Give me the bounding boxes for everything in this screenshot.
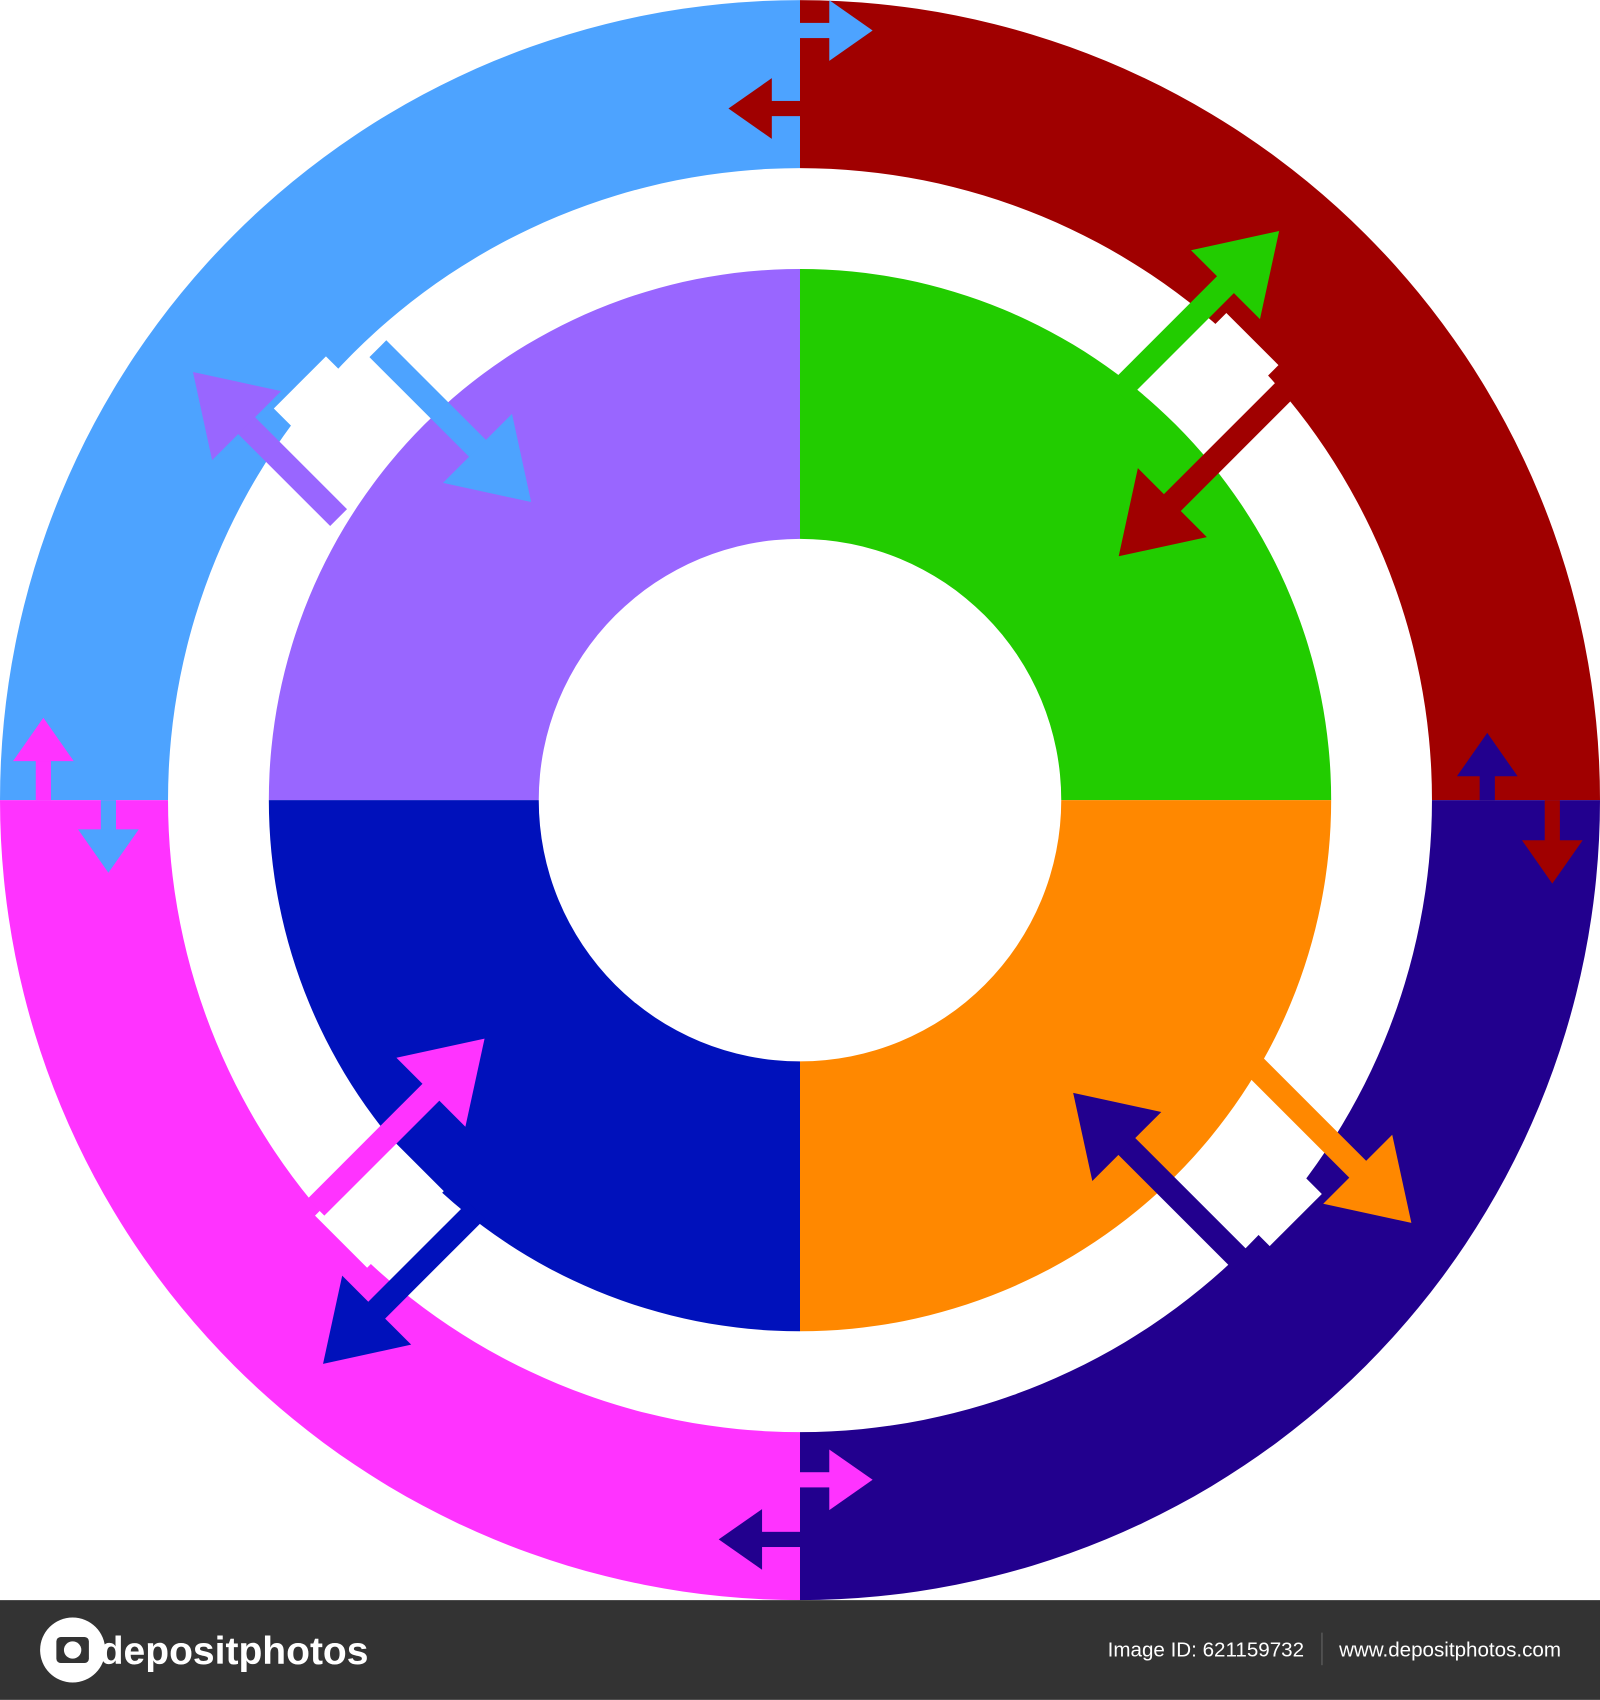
arrow: blue down-left xyxy=(289,1176,511,1398)
white connector gaps xyxy=(274,313,1322,1268)
small arrow: right red down xyxy=(1522,800,1583,884)
image id: Image ID: 621159732 xyxy=(1108,1639,1304,1662)
arrow: orange down-right xyxy=(1201,1012,1446,1257)
arrow: navy up-left xyxy=(1039,1058,1276,1296)
arrow: pink up-right xyxy=(281,1004,519,1242)
arrow: red down-left xyxy=(1084,353,1322,591)
small arrow: bottom pink right xyxy=(800,1449,873,1510)
logo xyxy=(40,1617,368,1683)
url: www.depositphotos.com xyxy=(1338,1639,1561,1662)
small arrow: left pink up xyxy=(13,718,74,800)
small arrow: top blue right xyxy=(800,0,873,61)
small arrow: top red left xyxy=(728,78,800,139)
arrow: green up-right xyxy=(1084,197,1314,426)
footer bar xyxy=(0,1600,1600,1700)
small arrow: bottom navy left xyxy=(719,1509,800,1570)
inner ring xyxy=(269,269,1331,1331)
small arrow: right navy up xyxy=(1457,733,1518,800)
small arrow: left blue down xyxy=(78,800,139,873)
arrow: blue down-right xyxy=(343,314,566,537)
logo: depositphotos xyxy=(100,1630,368,1673)
arrow: purple up-left xyxy=(158,337,373,552)
